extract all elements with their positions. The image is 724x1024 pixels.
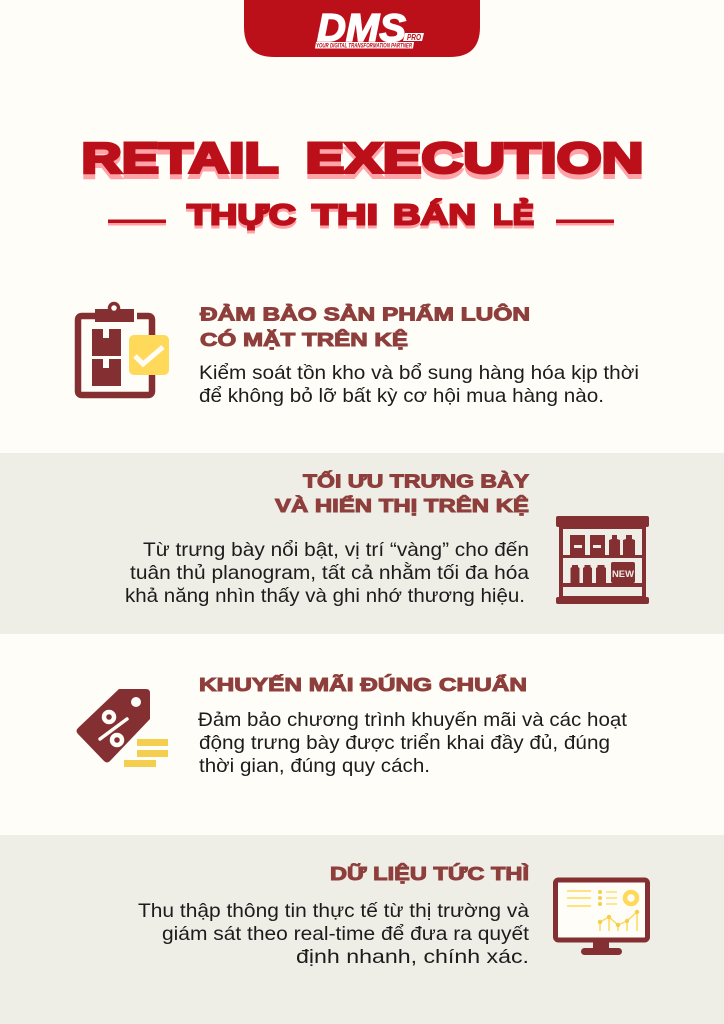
- heading: section 1: CÓ MẶT TRÊN KỆ: [200, 329, 408, 350]
- text block: section 4 body: Thu thập thông tin thực tế từ thị trường và: [138, 900, 529, 922]
- text block: section 3 body: động trưng bày được triển khai đầy đủ, đúng: [199, 732, 610, 754]
- text block: section 4 body: giám sát theo real-time để đưa ra quyết: [162, 923, 530, 945]
- logo header: [244, 0, 480, 57]
- panel: band 4 background: [0, 835, 724, 1024]
- title: EXECUTION: [306, 134, 644, 182]
- title: RETAIL: [82, 134, 278, 182]
- icon: monitor dashboard: [556, 880, 648, 955]
- panel: section 1 text: [199, 304, 639, 407]
- subtitle: THỰC: [187, 202, 296, 234]
- panel: band 2 background: [0, 453, 724, 634]
- text block: section 2 body: khả năng nhìn thấy và ghi nhớ thương hiệu.: [125, 585, 525, 607]
- subtitle: BÁN: [393, 202, 476, 234]
- title: EXECUTION: [306, 140, 644, 188]
- heading: section 3: KHUYẾN MÃI ĐÚNG CHUẨN: [199, 674, 527, 695]
- subtitle: [108, 198, 614, 234]
- text block: section 2 body: [125, 539, 529, 607]
- text block: section 4 body: định nhanh, chính xác.: [296, 946, 529, 968]
- panel: section 4 text: [138, 863, 530, 968]
- subtitle: LẺ: [493, 198, 534, 232]
- heading: section 2: VÀ HIỂN THỊ TRÊN KỆ: [275, 495, 529, 516]
- subtitle: THI: [312, 202, 378, 234]
- text block: section 3 body: Đảm bảo chương trình khuyến mãi và các hoạt: [198, 709, 628, 731]
- heading: section 1: ĐẢM BẢO SẢN PHẨM LUÔN: [200, 304, 530, 324]
- text block: section 3 body: [198, 709, 628, 777]
- text block: section 1 body: [199, 362, 639, 407]
- title: [82, 134, 644, 188]
- icon: store shelf: [556, 516, 649, 604]
- subtitle: BÁN: [393, 200, 476, 232]
- icon: discount tag: [76, 689, 168, 767]
- heading: section 1: [200, 304, 530, 350]
- text block: section 1 body: để không bỏ lỡ bất kỳ cơ hội mua hàng nào.: [199, 385, 604, 407]
- text block: section 4 body: [138, 900, 530, 968]
- text block: section 2 body: Từ trưng bày nổi bật, vị trí “vàng” cho đến: [143, 539, 529, 561]
- title: RETAIL: [82, 140, 278, 188]
- text block: section 2 body: tuân thủ planogram, tất cả nhằm tối đa hóa: [130, 561, 529, 584]
- panel: section 3 text: [198, 674, 628, 777]
- heading: section 2: TỐI ƯU TRƯNG BÀY: [303, 470, 530, 492]
- logo header: YOUR DIGITAL TRANSFORMATION PARTNER: [316, 44, 412, 50]
- subtitle: THỰC: [187, 200, 296, 232]
- subtitle: LẺ: [493, 202, 534, 234]
- panel: section 2 text: [125, 470, 530, 607]
- text block: section 1 body: Kiểm soát tồn kho và bổ sung hàng hóa kịp thời: [199, 362, 639, 384]
- heading: section 2: [275, 470, 530, 516]
- heading: section 4: DỮ LIỆU TỨC THÌ: [330, 863, 529, 884]
- icon: store shelf: NEW: [612, 569, 634, 580]
- logo header: DMS: [317, 7, 406, 50]
- text block: section 3 body: thời gian, đúng quy cách.: [199, 755, 430, 777]
- icon: clipboard with boxes and check: [78, 304, 169, 395]
- subtitle: THI: [312, 200, 378, 232]
- logo header: PRO: [407, 33, 422, 42]
